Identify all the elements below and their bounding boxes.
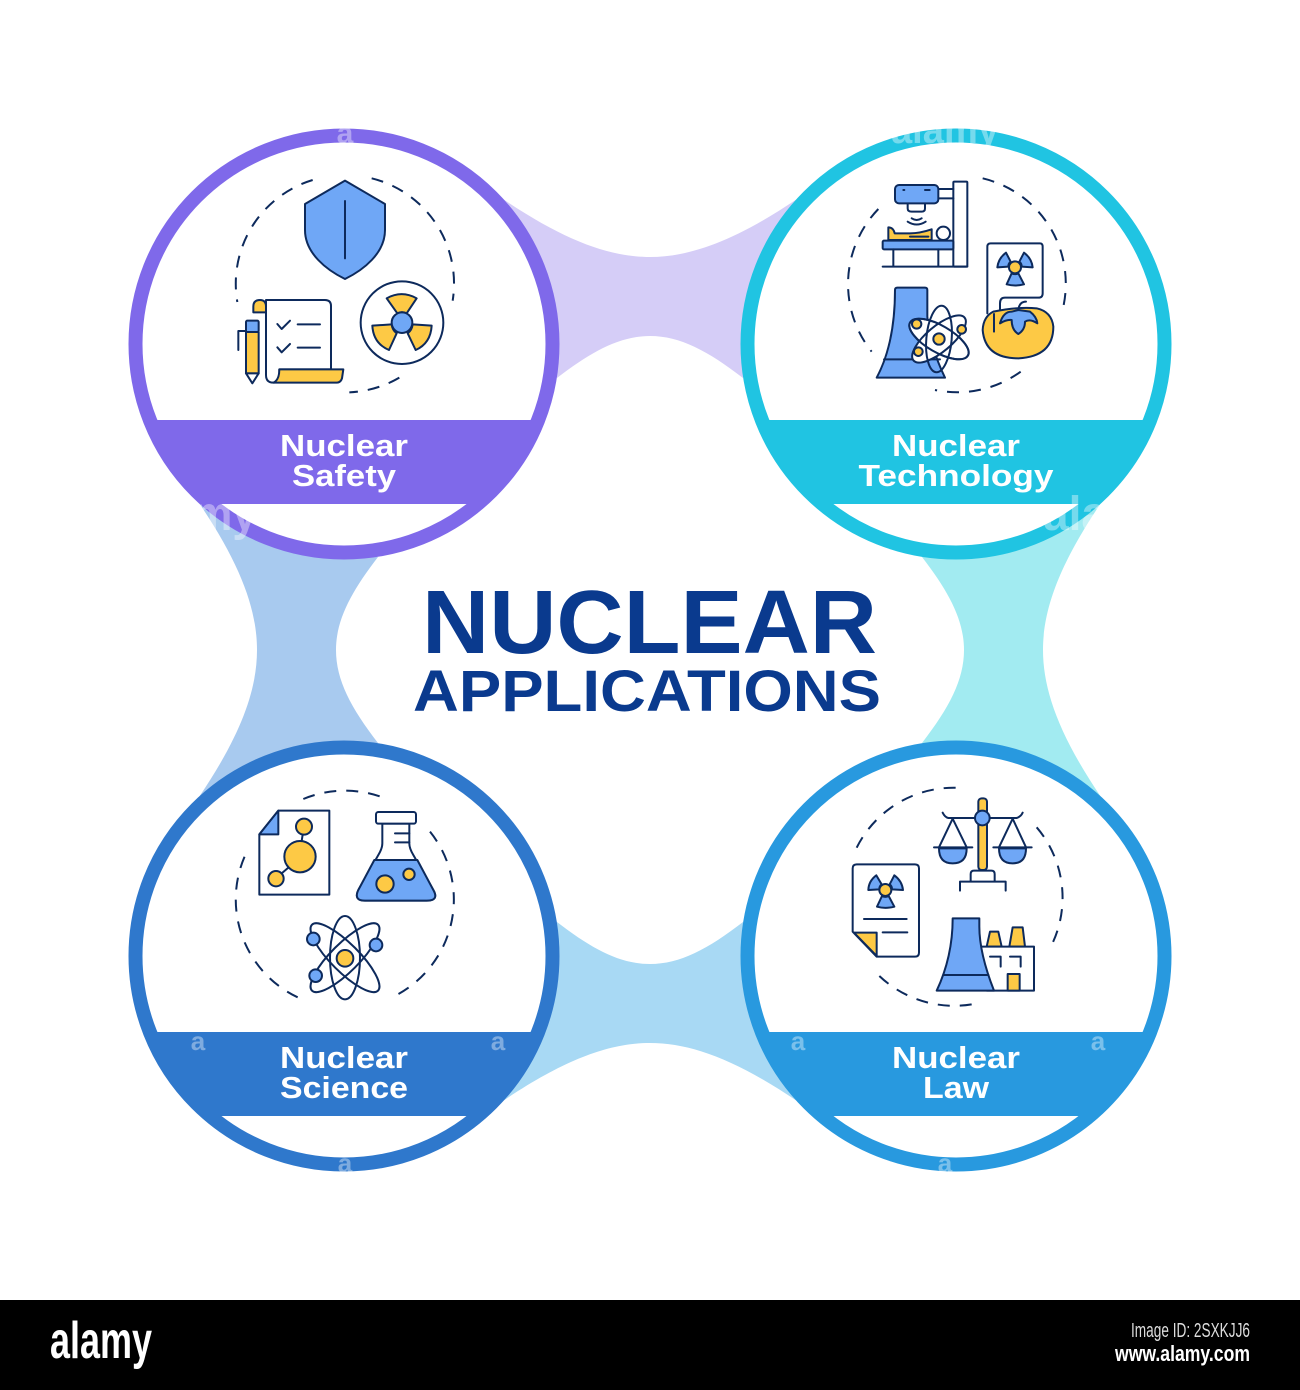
icon group: safety xyxy=(236,178,454,392)
icon group: law xyxy=(853,788,1063,1006)
label: nuclear law xyxy=(892,1040,1020,1105)
label band: nuclear technology xyxy=(770,420,1142,504)
label: nuclear safety xyxy=(280,428,408,493)
watermark fragments: a xyxy=(791,1026,806,1056)
title xyxy=(413,573,881,724)
watermark fragments xyxy=(191,108,1107,1178)
label: nuclear technology: Nuclear xyxy=(892,428,1020,463)
icon: scales of justice xyxy=(934,798,1032,891)
watermark fragments: a xyxy=(938,1148,953,1178)
footer logo: alamy xyxy=(50,1312,152,1370)
icon: shield xyxy=(305,181,385,279)
watermark fragments: a xyxy=(491,1026,506,1056)
icon: nuclear plant xyxy=(937,918,1034,991)
label: nuclear safety: Nuclear xyxy=(280,428,408,463)
icon: medical scanner xyxy=(883,182,967,267)
icon: radiation sign xyxy=(361,281,443,364)
icon: irradiated tomato xyxy=(983,243,1053,358)
label: nuclear technology xyxy=(858,428,1054,493)
watermark fragments: a xyxy=(337,117,354,150)
label: nuclear science xyxy=(280,1040,408,1105)
connector: bottom xyxy=(503,922,797,1101)
icon: atom xyxy=(302,915,388,1001)
watermark fragments: a xyxy=(338,1148,353,1178)
icon: radiation document xyxy=(853,864,919,957)
label: nuclear science: Science xyxy=(280,1070,408,1105)
icon: flask xyxy=(357,812,435,901)
icon group: science xyxy=(236,791,454,1001)
label: nuclear law: Law xyxy=(923,1070,990,1105)
icon: checklist and pen xyxy=(238,300,343,383)
icon group: technology xyxy=(848,178,1066,392)
panel: nuclear law xyxy=(741,748,1171,1164)
connector: right xyxy=(922,503,1101,797)
watermark fragments: my xyxy=(193,488,257,541)
panel: nuclear safety xyxy=(129,136,559,552)
connector: top xyxy=(503,199,797,378)
watermark fragments: a xyxy=(191,1026,206,1056)
connector: left xyxy=(199,503,378,797)
label band: nuclear science xyxy=(158,1032,530,1116)
label band: nuclear safety xyxy=(158,420,530,504)
watermark fragments: alamy xyxy=(891,108,1000,152)
title: NUCLEAR xyxy=(422,573,877,673)
label: nuclear science: Nuclear xyxy=(280,1040,408,1075)
icon: cooling tower with atom xyxy=(877,288,975,378)
label: nuclear law: Nuclear xyxy=(892,1040,1020,1075)
panel: nuclear technology xyxy=(741,136,1171,552)
label: nuclear technology: Technology xyxy=(858,458,1054,493)
watermark fragments: a xyxy=(1091,1026,1106,1056)
label: nuclear safety: Safety xyxy=(292,458,397,493)
watermark fragments: ala xyxy=(1043,488,1107,541)
title: APPLICATIONS xyxy=(413,659,881,724)
footer bar xyxy=(0,1300,1300,1390)
panel: nuclear science xyxy=(129,748,559,1164)
footer url: www.alamy.com xyxy=(1114,1341,1250,1366)
icon: molecule document xyxy=(259,811,329,895)
label band: nuclear law xyxy=(770,1032,1142,1116)
